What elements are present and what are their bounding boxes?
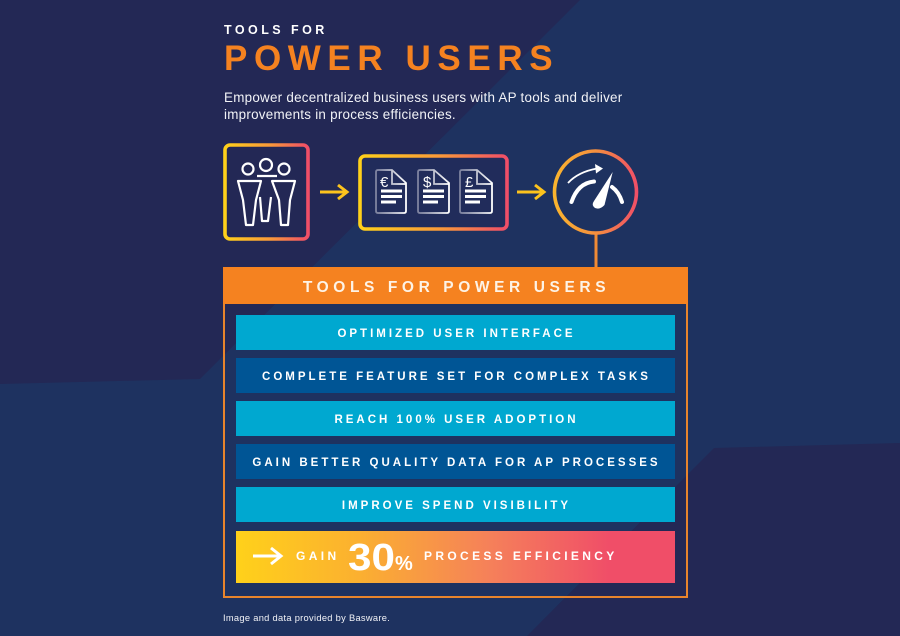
panel header: TOOLS FOR POWER USERS xyxy=(303,279,610,296)
row: visibility: IMPROVE SPEND VISIBILITY xyxy=(342,500,571,512)
callout: process efficiency xyxy=(236,531,675,583)
row: adoption xyxy=(236,401,675,436)
row: feature set xyxy=(236,358,675,393)
intro text xyxy=(224,90,622,122)
number: 30: 30 xyxy=(348,537,395,579)
number: percent sign: % xyxy=(395,553,413,575)
flow diagram xyxy=(223,143,638,267)
heading: tools for: TOOLS FOR xyxy=(224,23,328,37)
intro text: Empower decentralized business users with AP tools and deliver xyxy=(224,90,622,105)
panel header xyxy=(223,267,688,304)
icon: euro document: € xyxy=(380,174,389,191)
arrow 1 xyxy=(320,185,347,199)
icon: euro document xyxy=(376,170,406,213)
source note: Image and data provided by Basware. xyxy=(223,613,390,623)
row: adoption: REACH 100% USER ADOPTION xyxy=(334,414,579,426)
label: gain: GAIN xyxy=(296,549,340,563)
label: process efficiency: PROCESS EFFICIENCY xyxy=(424,549,618,563)
row: data quality xyxy=(236,444,675,479)
icon: speedometer xyxy=(554,151,636,233)
icon: invoices box xyxy=(360,156,507,229)
icon: pound document: £ xyxy=(465,174,474,191)
icon: arrow xyxy=(253,546,284,566)
icon: dollar document xyxy=(418,170,449,213)
row: visibility xyxy=(236,487,675,522)
row: feature set: COMPLETE FEATURE SET FOR COMPLEX TASKS xyxy=(262,371,651,383)
arrow 2 xyxy=(517,185,544,199)
row: interface xyxy=(236,315,675,350)
icon: people box xyxy=(225,145,308,239)
icon: pound document xyxy=(460,170,492,213)
connector line xyxy=(594,232,598,268)
row: interface: OPTIMIZED USER INTERFACE xyxy=(337,328,576,340)
panel: tools list xyxy=(223,267,688,598)
intro text: improvements in process efficiencies. xyxy=(224,107,456,122)
row: data quality: GAIN BETTER QUALITY DATA FOR AP PROCESSES xyxy=(252,457,661,469)
heading: power users: POWER USERS xyxy=(224,39,559,78)
icon: dollar document: $ xyxy=(423,174,432,191)
